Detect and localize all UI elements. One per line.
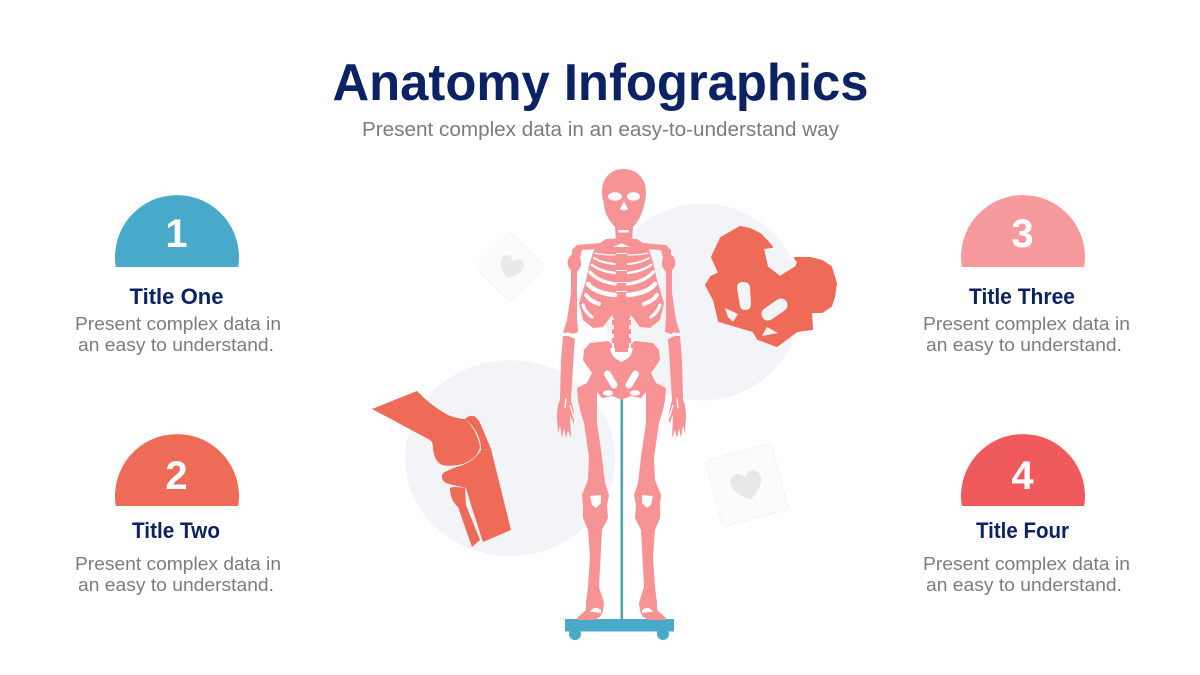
right half of skeleton [621, 238, 686, 620]
badge: number three [961, 195, 1085, 267]
panel: item two [75, 434, 281, 595]
panel: item three [923, 195, 1130, 355]
icon: card with heart, left [475, 232, 545, 302]
stand pole [620, 396, 623, 620]
text block: item one description [75, 313, 281, 355]
text block: item three description [923, 313, 1130, 355]
badge: number one [115, 195, 239, 267]
background circle: upper [603, 204, 801, 400]
skull [602, 169, 646, 240]
badge: number one: 1 [165, 212, 188, 256]
text block: item two description [75, 553, 281, 595]
stand base and wheels [565, 619, 674, 640]
heading: title one: Title One [130, 284, 224, 309]
heading: title three: Title Three [969, 284, 1075, 309]
badge: number four: 4 [1011, 454, 1034, 498]
badge: number three: 3 [1011, 212, 1034, 256]
badge: number four [961, 434, 1085, 506]
panel: item one [75, 195, 281, 355]
text block: item three description: an easy to understand. [926, 334, 1122, 355]
badge: number two [115, 434, 239, 506]
text block: item four description [923, 553, 1130, 595]
illustration: pelvis bone [706, 227, 836, 346]
badge: number two: 2 [165, 454, 188, 498]
illustration: skeleton on stand [557, 169, 686, 640]
pelvis and leg [577, 341, 622, 620]
text block: item one description: an easy to understand. [78, 334, 274, 355]
text block: item two description: an easy to understand. [78, 574, 274, 595]
text block: item four description: an easy to understand. [926, 574, 1122, 595]
ribcage [579, 243, 622, 352]
text block: item four description: Present complex data in [923, 553, 1130, 574]
panel: item four [923, 434, 1130, 595]
illustration: knee joint [372, 391, 511, 547]
skeleton body [557, 169, 686, 620]
heading: title two: Title Two [132, 518, 220, 543]
left half of skeleton [557, 238, 622, 620]
subtitle: Present complex data in an easy-to-understand way [362, 119, 839, 141]
text block: item two description: Present complex data in [75, 553, 281, 574]
hand detail [565, 398, 574, 418]
arm [563, 254, 581, 334]
clavicle [572, 238, 622, 258]
title: Anatomy Infographics [332, 54, 868, 112]
text block: item three description: Present complex data in [923, 313, 1130, 334]
background circle: lower [405, 360, 615, 556]
icon: card with heart, right [705, 443, 789, 527]
heading: title four: Title Four [976, 518, 1069, 543]
text block: item one description: Present complex data in [75, 313, 281, 334]
